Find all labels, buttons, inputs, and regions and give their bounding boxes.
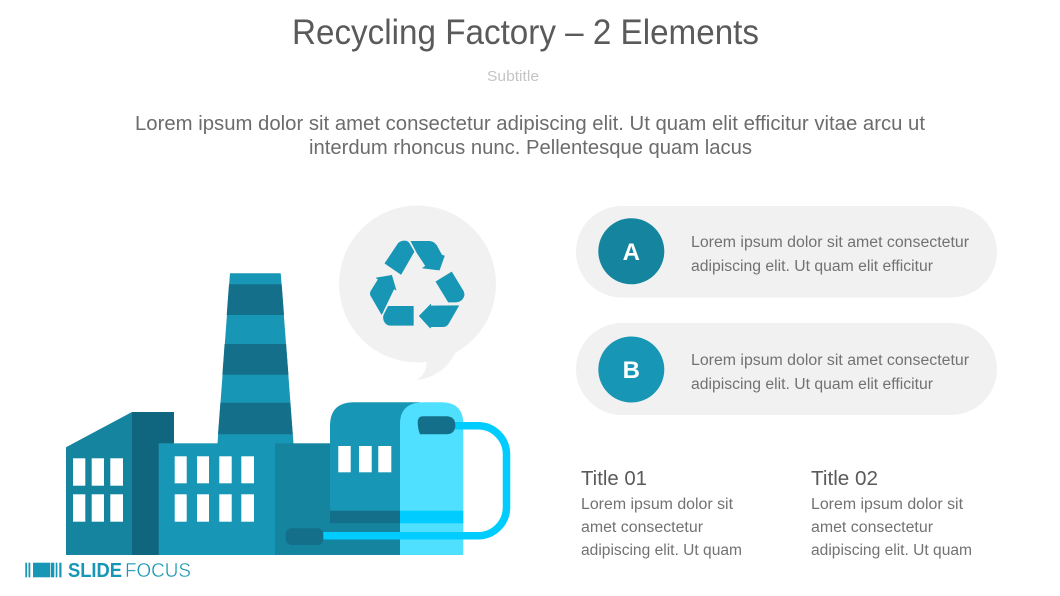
text B [691, 352, 969, 393]
panel: A [576, 206, 997, 298]
intro text: Lorem ipsum dolor sit amet consectetur adipiscing elit. Ut quam elit efficitur vitae arcu ut [135, 112, 925, 135]
subtitle: Subtitle [487, 68, 539, 85]
speech bubble with recycling icon [339, 206, 496, 380]
icon: recycling arrows [370, 241, 464, 328]
badge B: B [623, 357, 640, 384]
logo: SlideFocus: FOCUS [125, 560, 191, 582]
text A: Lorem ipsum dolor sit amet consectetur [691, 234, 969, 251]
connecting tube [323, 426, 506, 536]
text block: Title 02 [811, 468, 972, 559]
text block: Title 02: amet consectetur [811, 519, 933, 536]
tube cap: top [418, 416, 455, 434]
badge B [598, 336, 664, 402]
badge A: A [623, 239, 640, 266]
text block: Title 01: amet consectetur [581, 519, 703, 536]
intro text [135, 112, 925, 159]
chimney [218, 273, 294, 444]
text block: Title 02: Title 02 [811, 468, 878, 490]
text block: Title 01: Lorem ipsum dolor sit [581, 496, 734, 513]
text block: Title 01: Title 01 [581, 468, 647, 490]
speech bubble [339, 206, 496, 380]
badge A [598, 218, 664, 284]
text B: adipiscing elit. Ut quam elit efficitur [691, 376, 933, 393]
tube cap: bottom [286, 528, 323, 545]
title: Recycling Factory – 2 Elements [292, 13, 759, 52]
logo: SlideFocus: SLIDE [68, 560, 122, 582]
center building [159, 443, 330, 555]
panel: B [576, 323, 997, 415]
text block: Title 02: adipiscing elit. Ut quam [811, 542, 972, 559]
text block: Title 01: adipiscing elit. Ut quam [581, 542, 742, 559]
text A: adipiscing elit. Ut quam elit efficitur [691, 258, 933, 275]
intro text: interdum rhoncus nunc. Pellentesque quam lacus [309, 136, 752, 159]
text block: Title 02: Lorem ipsum dolor sit [811, 496, 964, 513]
recycling machine [286, 402, 506, 555]
logo: SlideFocus [25, 560, 191, 582]
factory illustration [66, 273, 506, 555]
text block: Title 01 [581, 468, 742, 559]
text A [691, 234, 969, 275]
text B: Lorem ipsum dolor sit amet consectetur [691, 352, 969, 369]
left building [66, 412, 174, 555]
